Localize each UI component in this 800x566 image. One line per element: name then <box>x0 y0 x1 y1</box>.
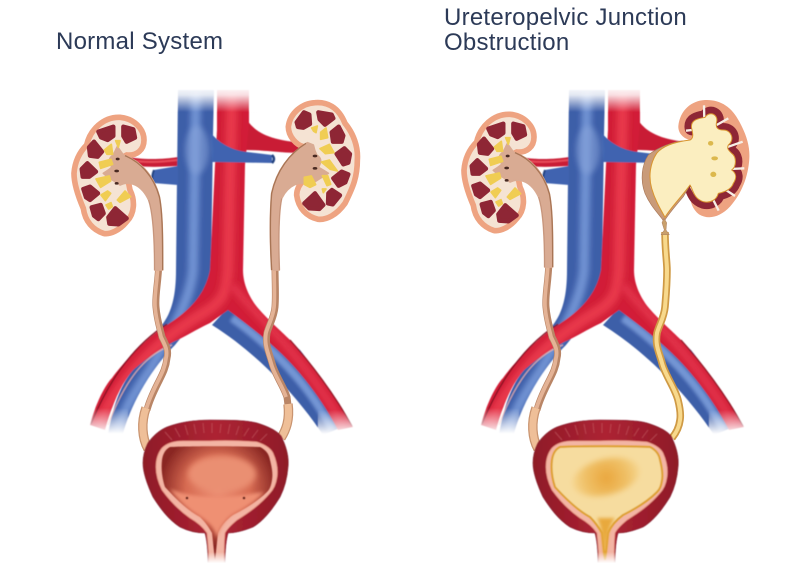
right kidney <box>270 103 357 270</box>
bladder cavity <box>162 446 272 560</box>
right ureter <box>265 262 289 438</box>
panel: ureteropelvic junction obstruction <box>464 86 753 566</box>
bladder wall <box>143 420 288 563</box>
urine-filled bladder cavity <box>552 446 662 560</box>
yellow dilated right ureter <box>656 232 680 438</box>
heading: Ureteropelvic Junction Obstruction: Obstruction <box>444 29 569 56</box>
hydronephrotic right kidney <box>642 100 749 235</box>
left ureter, obstructed side <box>533 262 558 449</box>
heading: Normal System: Normal System <box>56 28 223 55</box>
panel: normal system <box>74 86 362 566</box>
left ureter <box>143 262 168 449</box>
heading: Ureteropelvic Junction Obstruction <box>444 4 687 56</box>
heading: Ureteropelvic Junction Obstruction: Ureteropelvic Junction <box>444 4 687 31</box>
blood vessels <box>84 86 362 440</box>
bladder wall, obstructed side <box>533 420 678 563</box>
blood vessels, obstructed side <box>475 86 753 440</box>
left kidney <box>74 117 163 270</box>
normal left kidney, obstructed side <box>464 114 553 267</box>
